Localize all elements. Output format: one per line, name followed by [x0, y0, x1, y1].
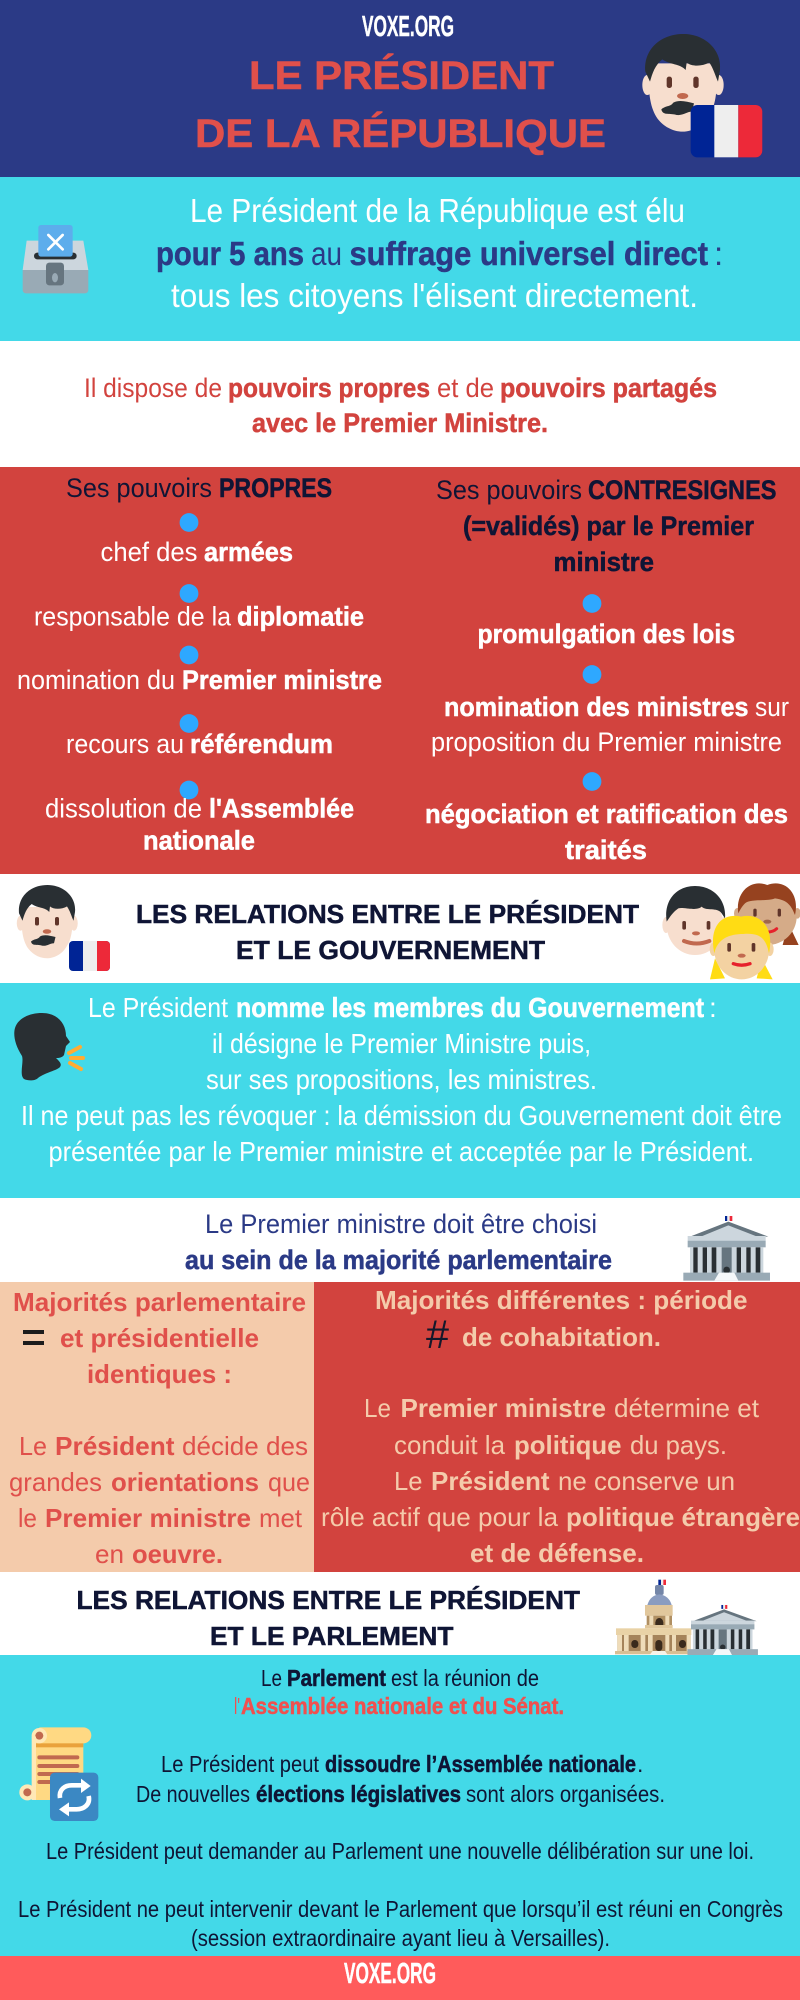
heading: majorités identiques: Majorités parlementaire — [13, 1287, 306, 1317]
brand: VOXE.ORG: VOXE.ORG — [362, 11, 454, 43]
text: congrès — [18, 1896, 783, 1951]
text: dissolution: dissoudre l’Assemblée nationale — [325, 1751, 636, 1777]
text: majorités identiques: Premier ministre — [45, 1503, 251, 1533]
heading: pouvoirs contresignés: ministre — [554, 547, 654, 577]
text: nomination du gouvernement: il désigne le Premier Ministre puis, — [212, 1028, 591, 1059]
text: congrès: (session extraordinaire ayant lieu à Versailles). — [191, 1925, 610, 1951]
heading: pouvoirs propres: PROPRES — [219, 473, 332, 503]
heading: relations président et parlement: LES RELATIONS ENTRE LE PRÉSIDENT — [76, 1585, 580, 1615]
text: election intro: tous les citoyens l'élisent directement. — [171, 277, 698, 314]
text: election intro — [156, 192, 723, 314]
text: cohabitation: ne conserve un — [558, 1466, 735, 1496]
icon: president with flag — [642, 34, 762, 157]
list: pouvoirs contresignés: nomination des ministres — [444, 692, 748, 722]
heading: majorités identiques — [13, 1287, 306, 1389]
heading: relations président et gouvernement: ET LE GOUVERNEMENT — [236, 935, 545, 965]
panel: election intro — [0, 177, 800, 341]
text: parlement definition: Assemblée nationale et du Sénat. — [241, 1693, 564, 1719]
heading: cohabitation: de cohabitation. — [462, 1322, 661, 1352]
text: election intro: pour 5 ans — [156, 235, 304, 272]
symbol: different: # — [426, 1313, 450, 1357]
footer — [0, 1956, 800, 2000]
brand: VOXE.ORG footer: VOXE.ORG — [344, 1958, 436, 1990]
list: pouvoirs propres: nationale — [143, 826, 255, 856]
text block: powers summary: pouvoirs propres — [228, 373, 430, 403]
text: cohabitation: du pays. — [630, 1430, 727, 1460]
heading: pouvoirs contresignés — [436, 475, 776, 577]
list: pouvoirs contresignés: négociation et ratification des — [425, 799, 788, 829]
list: pouvoirs propres: chef des — [100, 537, 198, 567]
text: cohabitation: et de défense. — [470, 1538, 644, 1568]
text: parlement definition — [234, 1665, 564, 1719]
text: cohabitation — [321, 1393, 800, 1568]
list: pouvoirs propres: référendum — [190, 729, 333, 759]
heading: pouvoirs contresignés: (=validés) par le Premier — [463, 511, 754, 541]
text: majorités identiques: en — [95, 1539, 124, 1569]
text block: premier ministre: Le Premier ministre doit être choisi — [205, 1209, 597, 1239]
list: pouvoirs propres: responsable de la — [34, 602, 232, 632]
text: majorités identiques: oeuvre. — [132, 1539, 223, 1569]
text: cohabitation: rôle actif que pour la — [321, 1502, 559, 1532]
heading: cohabitation — [375, 1285, 748, 1352]
text block: powers summary — [84, 373, 717, 438]
text: cohabitation: politique — [514, 1430, 622, 1460]
text: cohabitation: Le — [364, 1393, 391, 1423]
heading: pouvoirs propres: Ses pouvoirs — [66, 473, 212, 503]
text: parlement definition: est la réunion de — [391, 1665, 539, 1691]
text: dissolution: sont alors organisées. — [466, 1781, 665, 1807]
list: pouvoirs contresignés — [425, 594, 789, 865]
title — [195, 53, 606, 156]
text: dissolution: Le Président peut — [161, 1751, 320, 1777]
heading: relations président et gouvernement — [136, 899, 639, 965]
icon: speaking head — [14, 1013, 83, 1080]
text: cohabitation: Président — [431, 1466, 550, 1496]
text: nomination du gouvernement: sur ses propositions, les ministres. — [206, 1064, 597, 1095]
title: DE LA RÉPUBLIQUE — [195, 111, 606, 156]
panel: powers — [0, 467, 800, 874]
text block: powers summary: pouvoirs partagés — [500, 373, 717, 403]
text: election intro: : — [714, 235, 723, 272]
text: cohabitation: conduit la — [394, 1430, 506, 1460]
list: pouvoirs propres: diplomatie — [237, 602, 364, 632]
heading: pouvoirs contresignés: CONTRESIGNES — [588, 475, 776, 505]
symbol: equals — [23, 1330, 44, 1345]
icon: palais and assemblée buildings — [615, 1580, 758, 1655]
text: majorités identiques: grandes — [9, 1467, 102, 1497]
heading: relations président et gouvernement: LES RELATIONS ENTRE LE PRÉSIDENT — [136, 899, 639, 929]
icon: ballot box — [23, 225, 88, 293]
heading: relations président et parlement — [76, 1585, 580, 1651]
text: majorités identiques: le — [18, 1503, 37, 1533]
panel: parlement — [0, 1655, 800, 1956]
text: majorités identiques: que — [268, 1467, 310, 1497]
panel: header — [0, 0, 800, 177]
text: parlement definition: l' — [234, 1693, 240, 1719]
text block: powers summary: avec le Premier Ministre. — [252, 408, 548, 438]
panel: majorités identiques — [0, 1282, 314, 1572]
list: pouvoirs contresignés: traités — [565, 835, 647, 865]
heading: majorités identiques: identiques : — [87, 1359, 232, 1389]
text: election intro: Le Président de la République est élu — [190, 192, 685, 229]
text: nomination du gouvernement: Le Président — [88, 992, 228, 1023]
icon: parliament building — [683, 1216, 770, 1281]
text: parlement definition: Le — [261, 1665, 282, 1691]
list: pouvoirs propres: l'Assemblée — [209, 794, 354, 824]
text block: powers summary: Il dispose de — [84, 373, 222, 403]
heading: majorités identiques: et présidentielle — [60, 1323, 259, 1353]
text: parlement definition: Parlement — [287, 1665, 386, 1691]
column: pouvoirs propres — [17, 473, 382, 856]
text: majorités identiques: met — [259, 1503, 303, 1533]
panel: cohabitation — [314, 1282, 800, 1572]
text block: powers summary: et de — [437, 373, 494, 403]
panel: nomination du gouvernement — [0, 983, 800, 1198]
list: pouvoirs propres: dissolution de — [45, 794, 202, 824]
text: election intro: au — [311, 235, 342, 272]
list: pouvoirs propres — [17, 513, 382, 856]
text: majorités identiques — [9, 1431, 310, 1569]
heading: cohabitation: Majorités différentes : période — [375, 1285, 748, 1315]
heading: relations président et parlement: ET LE PARLEMENT — [210, 1621, 454, 1651]
text: majorités identiques: Président — [55, 1431, 175, 1461]
text: majorités identiques: décide des — [182, 1431, 308, 1461]
text: dissolution — [136, 1751, 665, 1807]
title: LE PRÉSIDENT — [249, 53, 554, 98]
text: nomination du gouvernement — [21, 992, 782, 1167]
text: majorités identiques: Le — [19, 1431, 47, 1461]
icon: president with small flag — [17, 885, 110, 971]
text: cohabitation: Le — [394, 1466, 422, 1496]
list: pouvoirs propres: nomination du — [17, 665, 175, 695]
list: pouvoirs propres: armées — [204, 537, 293, 567]
text: cohabitation: politique étrangère — [566, 1502, 800, 1532]
list: pouvoirs contresignés: proposition du Premier ministre — [431, 727, 782, 757]
text: nomination du gouvernement: : — [709, 992, 717, 1023]
text block: premier ministre: au sein de la majorité parlementaire — [185, 1245, 612, 1275]
text: nomination du gouvernement: nomme les membres du Gouvernement — [236, 992, 704, 1023]
list: pouvoirs propres: Premier ministre — [182, 665, 382, 695]
icon: scroll with refresh — [19, 1727, 98, 1821]
text: election intro: suffrage universel direct — [350, 235, 708, 272]
column: pouvoirs contresignés — [425, 475, 789, 865]
text: dissolution: De nouvelles — [136, 1781, 250, 1807]
text block: premier ministre — [185, 1209, 612, 1275]
text: dissolution: . — [637, 1751, 643, 1777]
icon: family faces — [662, 883, 800, 979]
text: dissolution: élections législatives — [256, 1781, 461, 1807]
list: pouvoirs propres: recours au — [66, 729, 184, 759]
text: majorités identiques: orientations — [111, 1467, 259, 1497]
text: cohabitation: détermine et — [614, 1393, 760, 1423]
text: cohabitation: Premier ministre — [400, 1393, 606, 1423]
list: pouvoirs contresignés: sur — [755, 692, 789, 722]
heading: pouvoirs propres — [66, 473, 332, 503]
list: pouvoirs contresignés: promulgation des lois — [478, 619, 735, 649]
heading: pouvoirs contresignés: Ses pouvoirs — [436, 475, 582, 505]
